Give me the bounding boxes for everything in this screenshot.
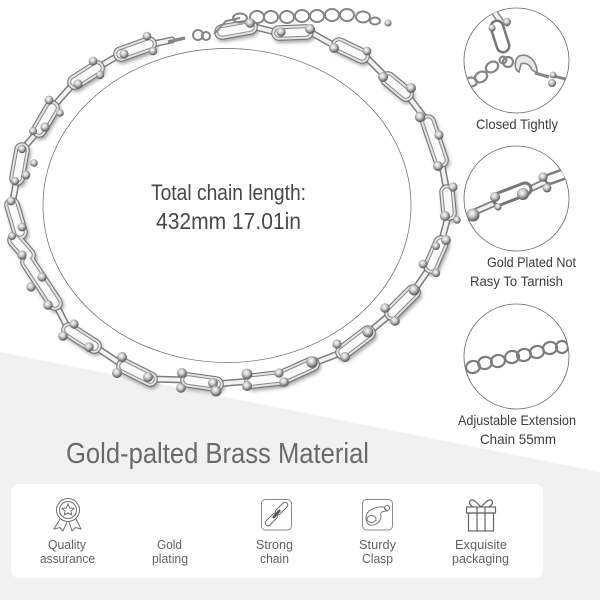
feature card: [11, 484, 543, 578]
label: sturdy clasp: [359, 537, 396, 566]
lobster clasp: [168, 18, 240, 42]
extension chain: [233, 9, 380, 24]
label: quality assurance: Quality: [48, 537, 86, 552]
label: gold plating: plating: [152, 551, 188, 566]
label: exquisite packaging: Exquisite: [455, 537, 507, 552]
label: quality assurance: [40, 537, 95, 566]
label: gold plating: [152, 537, 188, 566]
necklace chain photo: [7, 9, 461, 396]
icon: gift box: [466, 500, 496, 531]
label: sturdy clasp: Clasp: [362, 551, 393, 566]
large ellipse outline: [43, 48, 411, 362]
caption: closed tightly: Closed Tightly: [476, 116, 558, 132]
label: sturdy clasp: Sturdy: [359, 537, 396, 552]
caption: adjustable extension: [458, 412, 576, 447]
heading: chain length: Total chain length:: [151, 180, 306, 205]
heading: chain length: [151, 180, 306, 234]
heading: chain length: 432mm 17.01in: [156, 208, 301, 234]
icon: chain: [262, 500, 292, 530]
label: strong chain: chain: [260, 551, 289, 566]
label: quality assurance: assurance: [40, 551, 95, 566]
caption: gold plated: [470, 254, 576, 289]
label: exquisite packaging: packaging: [452, 551, 509, 566]
label: exquisite packaging: [452, 537, 509, 566]
caption: adjustable extension: Adjustable Extension: [458, 412, 576, 428]
heading: material: Gold-palted Brass Material: [66, 438, 369, 470]
chain balls: [7, 18, 461, 396]
icon: clasp: [362, 500, 392, 530]
label: strong chain: Strong: [256, 537, 293, 552]
detail circle: plated links: [464, 146, 572, 251]
icon: quality medal: [54, 498, 81, 531]
detail circle: closed clasp: [464, 8, 570, 113]
label: strong chain: [256, 537, 293, 566]
caption: adjustable extension: Chain 55mm: [480, 431, 556, 447]
caption: gold plated: Rasy To Tarnish: [470, 273, 563, 289]
detail circle: extension chain: [464, 304, 569, 409]
caption: gold plated: Gold Plated Not: [487, 254, 576, 270]
background panel: grey wedge: [0, 352, 600, 600]
label: gold plating: Gold: [157, 537, 182, 552]
